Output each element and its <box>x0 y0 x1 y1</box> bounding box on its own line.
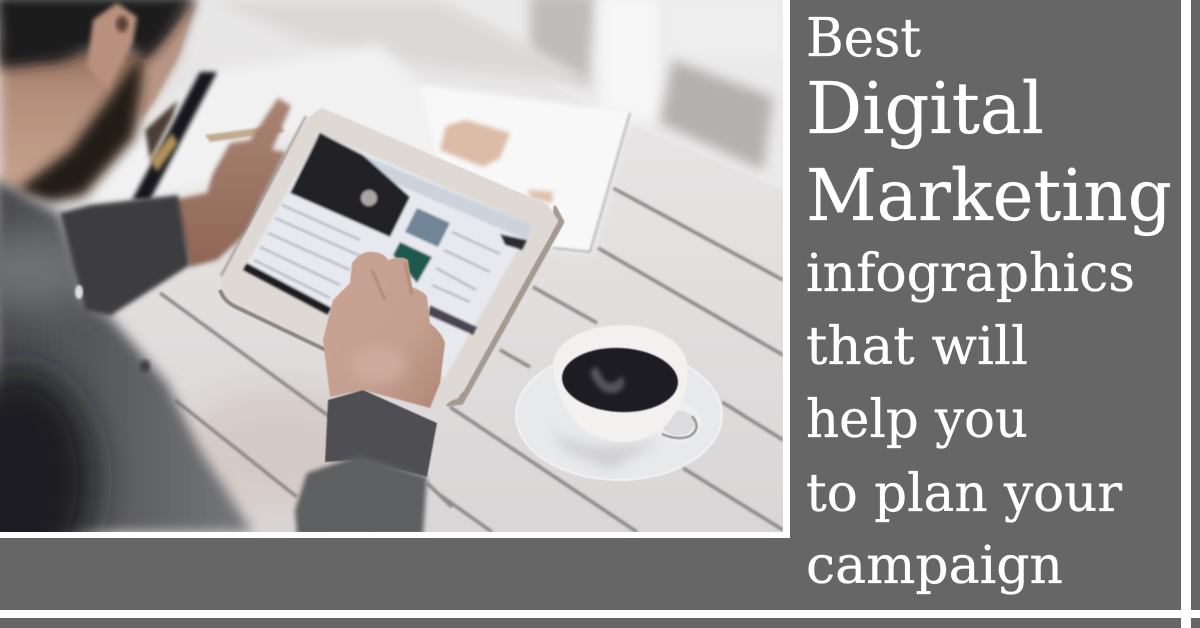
coffee saucer <box>516 350 722 480</box>
photo: man using tablet at table <box>0 0 783 590</box>
heading text: help you <box>806 390 1028 450</box>
open notebook <box>80 45 630 252</box>
coffee cup <box>553 325 698 442</box>
tablet <box>220 111 563 405</box>
background wall and window <box>210 0 783 190</box>
heading text <box>806 8 1172 596</box>
heading text: Marketing <box>806 154 1172 237</box>
wooden block <box>440 120 553 203</box>
sleeve on right arm <box>295 390 437 535</box>
right hand <box>323 252 445 408</box>
man's head and beard <box>0 0 195 202</box>
heading text: that will <box>806 317 1028 377</box>
heading text: to plan your <box>806 464 1122 524</box>
heading text: Best <box>806 8 921 69</box>
heading text: infographics <box>806 244 1135 304</box>
man's grey sweater <box>0 173 256 532</box>
tablet screen <box>243 133 532 377</box>
table surface with plank gaps <box>0 0 783 532</box>
left hand <box>173 98 291 267</box>
heading text: Digital <box>806 67 1044 150</box>
heading text: campaign <box>806 536 1063 596</box>
